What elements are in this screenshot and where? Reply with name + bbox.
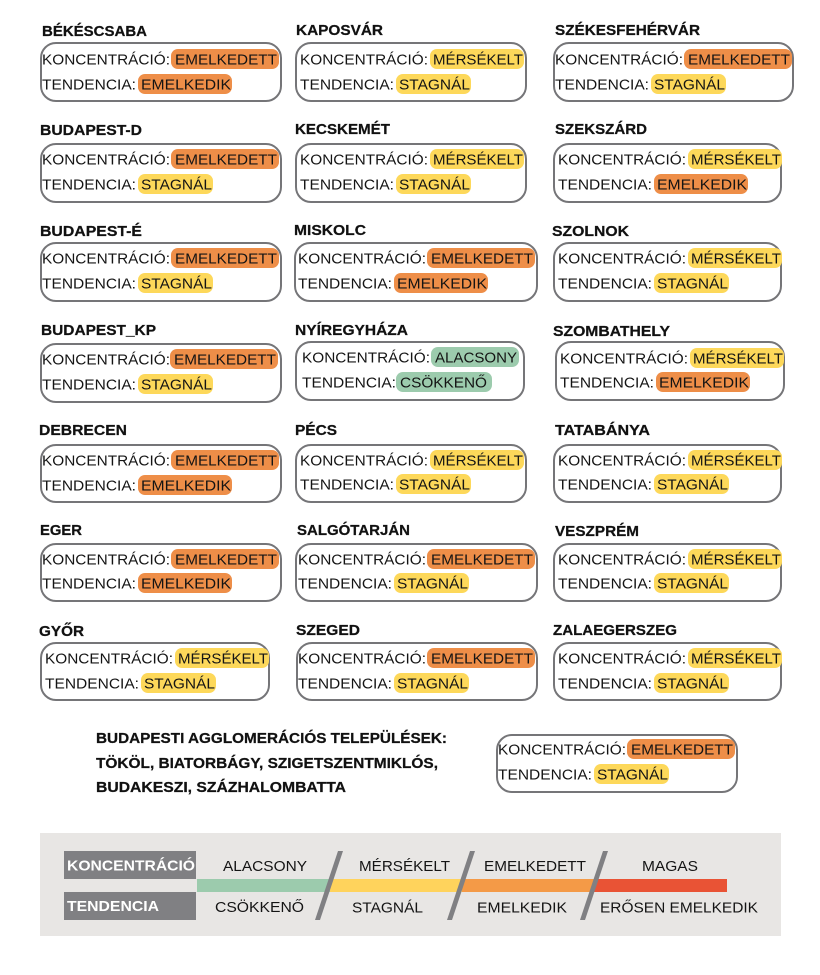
panel: Békéscsaba: EMELKEDETT: [175, 52, 277, 68]
panel: Budapest agglomeration: EMELKEDETT: [631, 742, 733, 758]
heading: Kecskemét: KECSKEMÉT: [295, 121, 390, 138]
panel: Szeged: TENDENCIA:: [298, 676, 392, 692]
panel: Kaposvár: [296, 22, 526, 101]
heading: Miskolc: MISKOLC: [294, 223, 367, 239]
panel: Tatabánya: KONCENTRÁCIÓ:: [558, 452, 686, 470]
heading: Eger: EGER: [40, 523, 83, 539]
text block: Budapest agglomeration settlements: [96, 729, 447, 796]
panel: Nyíregyháza: TENDENCIA:: [302, 374, 396, 392]
panel: Szekszárd: [554, 121, 782, 202]
panel: Miskolc: KONCENTRÁCIÓ:: [298, 250, 426, 268]
legend labels: levels: MÉRSÉKELT: [359, 858, 450, 875]
panel: Veszprém: KONCENTRÁCIÓ:: [558, 552, 686, 568]
panel: Szolnok: TENDENCIA:: [558, 276, 652, 292]
panel: Szolnok: MÉRSÉKELT: [691, 250, 781, 268]
panel: Szombathely: KONCENTRÁCIÓ:: [560, 350, 688, 368]
panel: Budapest agglomeration: KONCENTRÁCIÓ:: [498, 742, 626, 758]
panel: Kaposvár: STAGNÁL: [399, 76, 470, 94]
heading: Szekszárd: SZEKSZÁRD: [555, 121, 647, 138]
legend labels: levels: EMELKEDETT: [484, 858, 586, 875]
panel: Szolnok: STAGNÁL: [657, 276, 728, 292]
panel: Budapest KP: STAGNÁL: [141, 376, 212, 394]
panel: Kecskemét: MÉRSÉKELT: [433, 152, 523, 168]
panel: Békéscsaba: EMELKEDIK: [141, 76, 231, 94]
panel: Eger: TENDENCIA:: [42, 576, 136, 592]
panel: Pécs: MÉRSÉKELT: [433, 452, 523, 470]
panel: Veszprém: [554, 523, 782, 601]
panel: Békéscsaba: [41, 23, 281, 101]
panel: Kecskemét: KONCENTRÁCIÓ:: [300, 152, 428, 168]
panel: Budapest-D: [40, 123, 281, 202]
panel: Zalaegerszeg: MÉRSÉKELT: [691, 650, 781, 668]
text block: Budapest agglomeration settlements: BUDAKESZI, SZÁZHALOMBATTA: [96, 779, 347, 796]
panel: Budapest-É: STAGNÁL: [141, 276, 212, 292]
panel: Győr: MÉRSÉKELT: [178, 650, 268, 668]
panel: Budapest agglomeration: [497, 735, 737, 792]
panel: Budapest-É: KONCENTRÁCIÓ:: [42, 250, 170, 268]
text block: Budapest agglomeration settlements: TÖKÖL, BIATORBÁGY, SZIGETSZENTMIKLÓS,: [96, 754, 438, 772]
panel: Tatabánya: [554, 422, 782, 502]
heading: Szolnok: SZOLNOK: [552, 224, 630, 240]
panel: Budapest-D: STAGNÁL: [141, 176, 212, 194]
heading: Budapest KP: BUDAPEST_KP: [41, 323, 156, 339]
panel: Veszprém: STAGNÁL: [657, 576, 728, 592]
panel: Miskolc: [294, 223, 537, 301]
legend label: Tendencia: [64, 892, 196, 920]
panel: Kecskemét: STAGNÁL: [399, 176, 470, 194]
panel: Szolnok: [552, 224, 782, 301]
panel: Kecskemét: TENDENCIA:: [300, 176, 394, 194]
panel: Szekszárd: MÉRSÉKELT: [691, 152, 781, 168]
panel: Tatabánya: MÉRSÉKELT: [691, 452, 781, 470]
panel: Budapest-É: TENDENCIA:: [42, 276, 136, 292]
panel: Salgótarján: [296, 521, 537, 601]
panel: Szeged: STAGNÁL: [397, 676, 468, 692]
panel: Győr: KONCENTRÁCIÓ:: [45, 650, 173, 668]
heading: Tatabánya: TATABÁNYA: [555, 422, 651, 439]
legend labels: levels: STAGNÁL: [352, 900, 423, 916]
heading: Szombathely: SZOMBATHELY: [553, 324, 670, 340]
panel: Szolnok: KONCENTRÁCIÓ:: [558, 250, 686, 268]
panel: Nyíregyháza: CSÖKKENŐ: [400, 374, 487, 392]
panel: Szombathely: [553, 324, 784, 400]
panel: Kaposvár: TENDENCIA:: [300, 76, 394, 94]
panel: Budapest-D: TENDENCIA:: [42, 176, 136, 194]
panel: Szekszárd: EMELKEDIK: [657, 176, 747, 194]
panel: Székesfehérvár: STAGNÁL: [654, 76, 725, 94]
legend labels: levels: EMELKEDIK: [477, 900, 567, 916]
panel: Békéscsaba: TENDENCIA:: [42, 76, 136, 94]
panel: Debrecen: EMELKEDETT: [175, 452, 277, 470]
panel: Nyíregyháza: KONCENTRÁCIÓ:: [302, 350, 430, 366]
panel: Zalaegerszeg: TENDENCIA:: [558, 676, 652, 692]
panel: Debrecen: EMELKEDIK: [141, 478, 231, 494]
legend separators: [315, 851, 608, 920]
panel: Zalaegerszeg: KONCENTRÁCIÓ:: [558, 650, 686, 668]
heading: Budapest-D: BUDAPEST-D: [40, 123, 142, 139]
panel: Zalaegerszeg: [553, 623, 782, 700]
panel: Eger: KONCENTRÁCIÓ:: [42, 552, 170, 568]
panel: Budapest KP: KONCENTRÁCIÓ:: [42, 352, 170, 368]
panel: Eger: [40, 523, 281, 601]
panel: Kaposvár: KONCENTRÁCIÓ:: [300, 52, 428, 68]
heading: Salgótarján: SALGÓTARJÁN: [297, 521, 410, 539]
panel: Győr: [39, 622, 269, 700]
heading: Győr: GYŐR: [39, 622, 85, 640]
panel: Szekszárd: TENDENCIA:: [558, 176, 652, 194]
panel: Tatabánya: TENDENCIA:: [558, 476, 652, 494]
panel: Eger: EMELKEDIK: [141, 576, 231, 592]
heading: Zalaegerszeg: ZALAEGERSZEG: [553, 623, 677, 639]
panel: Miskolc: EMELKEDIK: [397, 276, 487, 292]
panel: Székesfehérvár: KONCENTRÁCIÓ:: [555, 52, 683, 68]
panel: Kaposvár: MÉRSÉKELT: [433, 52, 523, 68]
panel: Salgótarján: STAGNÁL: [397, 576, 468, 592]
legend labels: levels: CSÖKKENŐ: [215, 898, 304, 916]
panel: Székesfehérvár: EMELKEDETT: [688, 52, 790, 68]
heading: Budapest-É: BUDAPEST-É: [40, 223, 142, 240]
panel: Budapest KP: TENDENCIA:: [42, 376, 136, 394]
text block: Budapest agglomeration settlements: BUDAPESTI AGGLOMERÁCIÓS TELEPÜLÉSEK:: [96, 729, 447, 747]
heading: Békéscsaba: BÉKÉSCSABA: [42, 23, 148, 40]
panel: Budapest-D: EMELKEDETT: [175, 152, 277, 168]
panel: Pécs: STAGNÁL: [399, 476, 470, 494]
panel: Békéscsaba: KONCENTRÁCIÓ:: [42, 52, 170, 68]
legend scale bar: [197, 879, 727, 892]
legend labels: levels: MAGAS: [642, 858, 698, 875]
panel: Szombathely: TENDENCIA:: [560, 374, 654, 392]
panel: Tatabánya: STAGNÁL: [657, 476, 728, 494]
heading: Kaposvár: KAPOSVÁR: [296, 22, 384, 39]
panel: Budapest KP: EMELKEDETT: [174, 352, 276, 368]
panel: Salgótarján: EMELKEDETT: [431, 552, 533, 568]
panel: Szombathely: EMELKEDIK: [659, 374, 749, 392]
heading: Veszprém: VESZPRÉM: [555, 523, 639, 540]
panel: Budapest-D: KONCENTRÁCIÓ:: [42, 152, 170, 168]
panel: Zalaegerszeg: STAGNÁL: [657, 676, 728, 692]
panel: Debrecen: [39, 423, 281, 502]
panel: Debrecen: TENDENCIA:: [42, 478, 136, 494]
panel: Pécs: [295, 422, 526, 502]
panel: Veszprém: TENDENCIA:: [558, 576, 652, 592]
panel: Szeged: EMELKEDETT: [431, 650, 533, 668]
legend label: Koncentráció: [64, 851, 196, 879]
legend labels: levels: ALACSONY: [223, 858, 307, 875]
panel: Pécs: KONCENTRÁCIÓ:: [300, 452, 428, 470]
panel: Győr: TENDENCIA:: [45, 676, 139, 692]
legend labels: levels: [215, 858, 758, 916]
panel: Miskolc: TENDENCIA:: [298, 276, 392, 292]
legend label: Koncentráció: KONCENTRÁCIÓ: [67, 856, 195, 874]
legend: [40, 833, 781, 936]
heading: Székesfehérvár: SZÉKESFEHÉRVÁR: [555, 22, 701, 39]
panel: Székesfehérvár: TENDENCIA:: [555, 76, 649, 94]
panel: Budapest agglomeration: STAGNÁL: [597, 766, 668, 784]
heading: Szeged: SZEGED: [296, 623, 360, 639]
panel: Szeged: KONCENTRÁCIÓ:: [298, 650, 426, 668]
panel: Veszprém: MÉRSÉKELT: [691, 552, 781, 568]
panel: Nyíregyháza: ALACSONY: [435, 350, 517, 366]
panel: Szeged: [296, 623, 537, 700]
panel: Pécs: TENDENCIA:: [300, 476, 394, 494]
panel: Budapest KP: [41, 323, 281, 402]
panel: Budapest-É: EMELKEDETT: [175, 250, 277, 268]
panel: Debrecen: KONCENTRÁCIÓ:: [42, 452, 170, 470]
heading: Debrecen: DEBRECEN: [39, 423, 127, 439]
panel: Miskolc: EMELKEDETT: [431, 250, 533, 268]
panel: Budapest agglomeration: TENDENCIA:: [498, 766, 592, 784]
heading: Pécs: PÉCS: [295, 422, 337, 439]
panel: Eger: EMELKEDETT: [175, 552, 277, 568]
panel: Szekszárd: KONCENTRÁCIÓ:: [558, 152, 686, 168]
panel: Kecskemét: [295, 121, 526, 202]
panel: Salgótarján: KONCENTRÁCIÓ:: [298, 552, 426, 568]
panel: Szombathely: MÉRSÉKELT: [693, 350, 783, 368]
legend labels: levels: ERŐSEN EMELKEDIK: [600, 900, 758, 916]
heading: Nyíregyháza: NYÍREGYHÁZA: [295, 322, 409, 339]
legend label: Tendencia: TENDENCIA: [67, 898, 159, 915]
panel: Győr: STAGNÁL: [144, 676, 215, 692]
panel: Budapest-É: [40, 223, 281, 301]
panel: Salgótarján: TENDENCIA:: [298, 576, 392, 592]
panel: Nyíregyháza: [295, 322, 524, 400]
panel: Székesfehérvár: [554, 22, 793, 101]
